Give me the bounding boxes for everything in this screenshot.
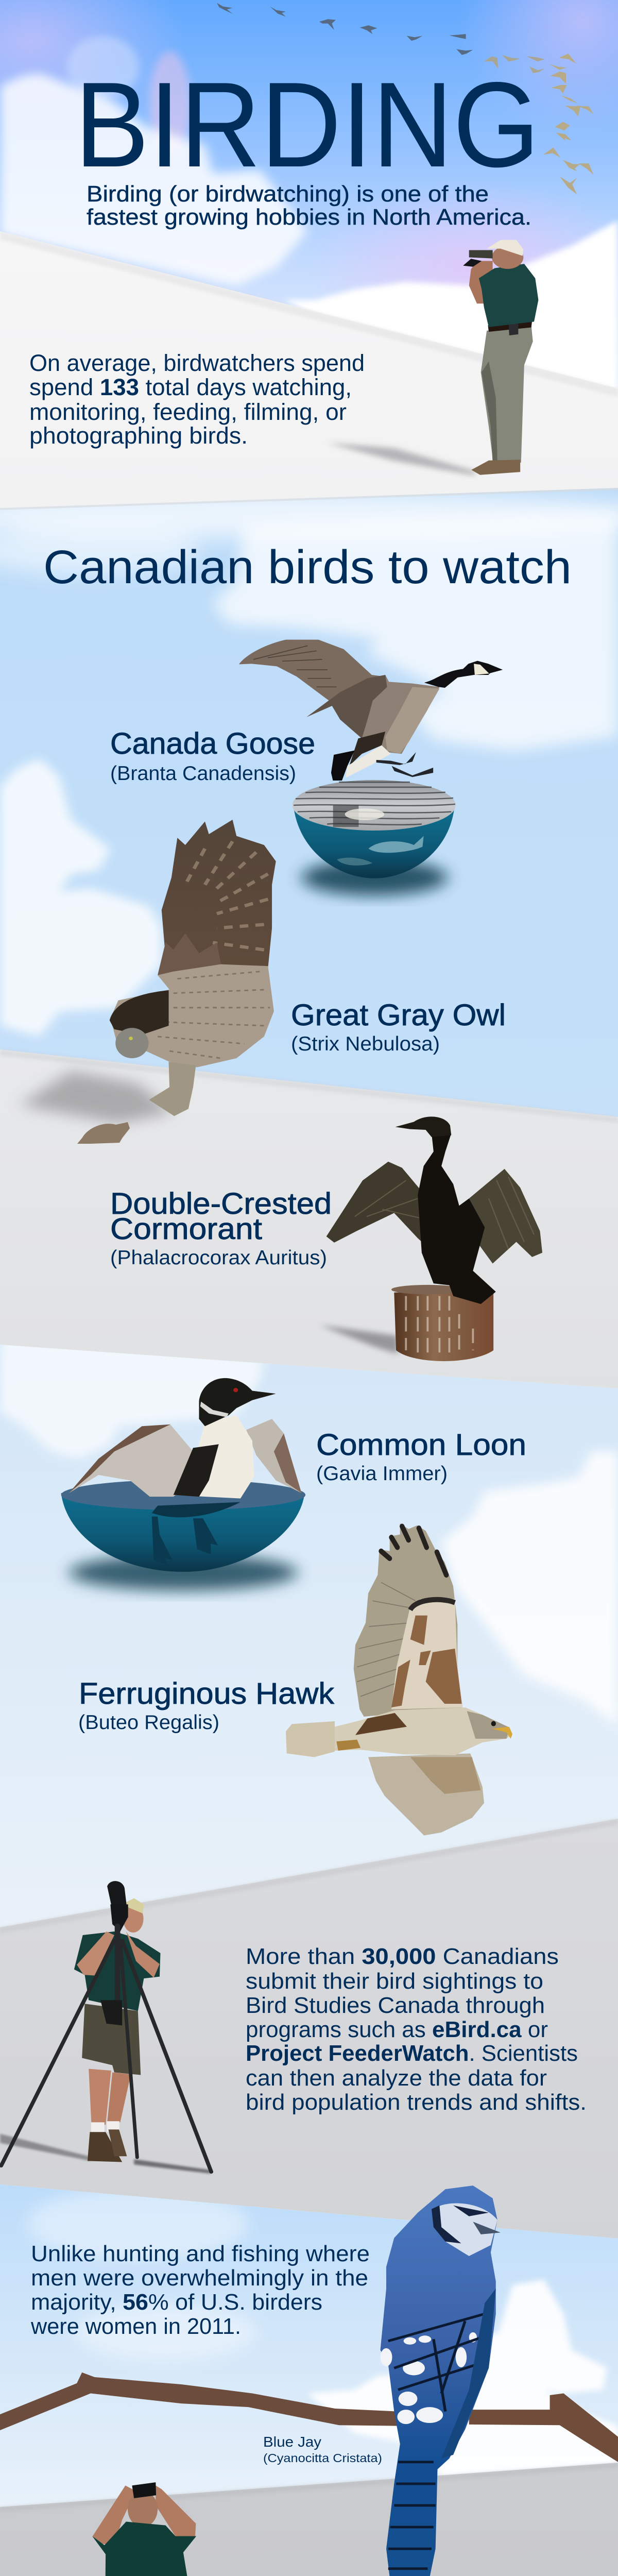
panel: average days: [0, 231, 618, 510]
text: citizen science: submit their bird sightings to: [246, 1969, 543, 1994]
label: Double-Crested Cormorant: [110, 1187, 332, 1269]
label: Great Gray Owl: (Strix Nebulosa): [291, 1033, 440, 1055]
label: Canada Goose: [110, 727, 315, 785]
figure: birder with spotting scope: [0, 1881, 211, 2174]
label: Great Gray Owl: [291, 998, 506, 1055]
subtitle: Birding (or birdwatching) is one of the: [87, 181, 489, 207]
illustration: common loon in bowl: [61, 1378, 305, 1590]
text: average days: On average, birdwatchers spend: [29, 350, 365, 376]
illustration: Canada goose: [239, 640, 503, 781]
label: Common Loon: [316, 1428, 526, 1485]
illustration: ferruginous hawk: [286, 1523, 512, 1836]
panel: spending: [0, 2463, 618, 2576]
panel: cormorant section: [0, 1049, 618, 1388]
text: citizen science: Project FeederWatch. Scientists: [246, 2041, 578, 2066]
label: Ferruginous Hawk: (Buteo Regalis): [78, 1711, 219, 1734]
subtitle: [87, 181, 531, 230]
illustration: water bowl with fish: [293, 780, 456, 895]
text: citizen science: programs such as eBird.ca or: [246, 2017, 548, 2042]
heading: Canadian birds to watch: Canadian birds to watch: [43, 541, 572, 594]
text: women birders: Unlike hunting and fishing where: [31, 2241, 370, 2266]
figure: birder in shorts: [0, 2482, 196, 2576]
label: Common Loon: Common Loon: [316, 1428, 526, 1462]
illustration: cormorant on stump: [319, 1116, 542, 1361]
label: Ferruginous Hawk: [78, 1677, 335, 1734]
text: citizen science: More than 30,000 Canadians: [246, 1944, 559, 1969]
label: Canada Goose: Canada Goose: [110, 727, 315, 760]
text: citizen science: Bird Studies Canada through: [246, 1993, 545, 2018]
icon: flock of geese: [217, 3, 594, 194]
label: Ferruginous Hawk: Ferruginous Hawk: [79, 1677, 335, 1710]
label: Double-Crested Cormorant: Cormorant: [110, 1212, 262, 1246]
text: average days: monitoring, feeding, filming, or: [29, 399, 347, 425]
label: Great Gray Owl: Great Gray Owl: [291, 998, 506, 1032]
label: Common Loon: (Gavia Immer): [316, 1463, 448, 1485]
label: Double-Crested Cormorant: (Phalacrocorax Auritus): [110, 1247, 327, 1269]
background: top sky: [0, 0, 618, 515]
illustration: great gray owl: [20, 820, 276, 1123]
background: third sky with clouds: [0, 1336, 618, 1958]
illustration: branch: [0, 2372, 618, 2462]
text: average days: [29, 350, 365, 449]
figure: birder with binoculars: [327, 240, 538, 475]
illustration: mouse: [77, 1122, 130, 1144]
illustration: blue jay: [381, 2185, 501, 2576]
label: Blue Jay: (Cyanocitta Cristata): [263, 2451, 382, 2465]
label: Canada Goose: (Branta Canadensis): [110, 762, 296, 785]
text: women birders: were women in 2011.: [30, 2314, 241, 2339]
label: Blue Jay: Blue Jay: [263, 2434, 321, 2450]
text: average days: spend 133 total days watching,: [29, 374, 352, 400]
subtitle: fastest growing hobbies in North America.: [87, 205, 531, 230]
title: BIRDING: [75, 57, 540, 192]
background: fourth sky with clouds: [0, 2179, 618, 2514]
text: citizen science: can then analyze the data for: [246, 2065, 547, 2091]
label: Double-Crested Cormorant: Double-Crested: [110, 1187, 332, 1221]
text: citizen science: [246, 1944, 587, 2115]
panel: citizen science: [0, 1819, 618, 2239]
background: second sky with clouds: [0, 484, 618, 1133]
text: women birders: men were overwhelmingly in the: [31, 2265, 368, 2291]
text: citizen science: bird population trends and shifts.: [246, 2090, 587, 2115]
label: Blue Jay: [263, 2434, 382, 2465]
text: average days: photographing birds.: [29, 422, 248, 449]
text: women birders: [30, 2241, 370, 2339]
text: women birders: majority, 56% of U.S. birders: [31, 2290, 322, 2315]
